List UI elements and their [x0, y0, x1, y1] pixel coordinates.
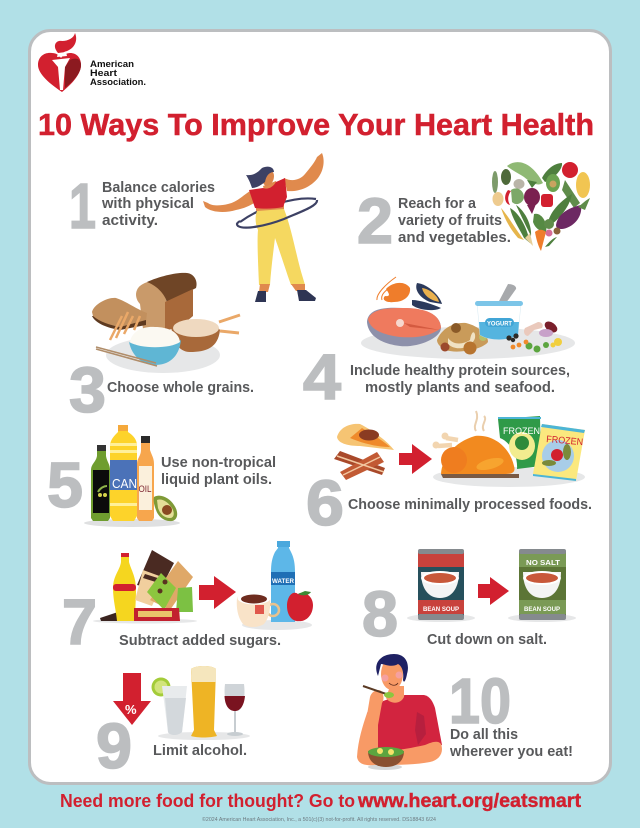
text: step 5: [161, 455, 276, 488]
illustration: man eating salad: [357, 654, 442, 770]
illustration: sweets to water, tea and apple: [93, 541, 313, 630]
number 7: 7: [62, 586, 97, 658]
illustration: soup cans: [407, 549, 576, 622]
logo wordmark: Heart: [90, 68, 118, 79]
text: step 2: Reach for a: [398, 196, 477, 212]
number 4: 4: [303, 341, 341, 413]
text: step 1: activity.: [102, 213, 158, 229]
illustration: processed foods to whole foods: FROZEN: [546, 434, 584, 448]
step 3: whole grains: [69, 273, 254, 426]
illustration: oil bottles and avocado: CAN: [112, 476, 137, 491]
step 6: minimally processed foods: [306, 411, 592, 539]
number 5: 5: [47, 449, 83, 521]
text: step 10: wherever you eat!: [449, 744, 573, 760]
number 8: 8: [362, 578, 398, 650]
arrow: down with percent: %: [125, 702, 137, 717]
arrow: sugars to alternatives: [199, 576, 236, 609]
text: step 2: and vegetables.: [398, 230, 511, 246]
text: step 4: [350, 363, 570, 396]
logo wordmark: American: [90, 59, 134, 70]
text: step 7: Subtract added sugars.: [119, 633, 281, 649]
step 5: plant oils: [47, 425, 276, 527]
can: regular soup: BEAN SOUP: [423, 607, 459, 613]
illustration: processed foods to whole foods: [334, 411, 585, 487]
text: step 3: Choose whole grains.: [107, 380, 254, 396]
text: step 10: Do all this: [450, 727, 518, 743]
icon: heart and torch: [38, 33, 81, 92]
can: no salt soup: [519, 549, 566, 620]
illustration: seafood, nuts, yogurt and beans: [361, 277, 575, 359]
logo wordmark: [90, 59, 146, 88]
step 9: alcohol: [96, 666, 250, 782]
number 3: 3: [69, 354, 106, 426]
text: step 2: variety of fruits: [398, 213, 502, 229]
text: step 1: with physical: [101, 196, 194, 212]
text: step 1: Balance calories: [102, 180, 215, 196]
number 9: 9: [96, 710, 132, 782]
logo: American Heart Association: [38, 33, 146, 92]
text: step 4: mostly plants and seafood.: [365, 380, 555, 396]
text: step 4: Include healthy protein sources,: [350, 363, 570, 379]
illustration: processed foods to whole foods: FROZEN: [503, 426, 540, 437]
illustration: woman with hula hoop: [203, 153, 324, 302]
text: step 9: Limit alcohol.: [153, 743, 247, 759]
can: regular soup: [418, 549, 464, 620]
text: step 6: Choose minimally processed foods.: [348, 497, 592, 513]
step 1: balance calories: [69, 153, 324, 302]
illustration: oil bottles and avocado: [84, 425, 180, 527]
illustration: bread, rice and grains: [92, 273, 240, 373]
text: step 8: Cut down on salt.: [427, 632, 547, 648]
logo wordmark: Association.: [90, 77, 146, 88]
text: step 2: [398, 196, 511, 246]
text: step 5: Use non-tropical: [161, 455, 276, 471]
title: 10 Ways To Improve Your Heart Health: [38, 107, 594, 142]
number 10: 10: [449, 665, 511, 737]
footer call to action: www.heart.org/eatsmart: [357, 790, 581, 812]
step 8: salt: [362, 549, 576, 650]
arrow: processed to whole: [399, 444, 432, 474]
step 2: fruits and vegetables: [357, 162, 590, 257]
copyright line: ©2024 American Heart Association, Inc., a 501(c)(3) not-for-profit. All rights reserved. DS18843 6/24: [202, 816, 436, 823]
illustration: down arrow and drinks: [113, 666, 250, 740]
can: no salt soup: BEAN SOUP: [524, 607, 560, 613]
step 7: added sugars: [62, 541, 313, 658]
illustration: oil bottles and avocado: OIL: [138, 484, 152, 494]
number 2: 2: [357, 185, 393, 257]
illustration: vegetable heart: [492, 162, 590, 251]
step 10: wherever you eat: [357, 654, 573, 770]
number 1: 1: [69, 170, 96, 242]
text: step 10: [449, 727, 573, 760]
illustration: seafood, nuts, yogurt and beans: YOGURT: [487, 320, 512, 328]
footer call to action: Need more food for thought? Go to: [60, 790, 355, 811]
illustration: sweets to water, tea and apple: WATER: [272, 578, 294, 585]
step 4: protein sources: [303, 277, 575, 413]
can: no salt soup: NO SALT: [526, 560, 561, 567]
text: step 5: liquid plant oils.: [161, 472, 272, 488]
text: step 1: [101, 180, 215, 229]
arrow: to no salt: [478, 577, 509, 605]
footer call to action: [60, 790, 581, 812]
number 6: 6: [306, 467, 344, 539]
